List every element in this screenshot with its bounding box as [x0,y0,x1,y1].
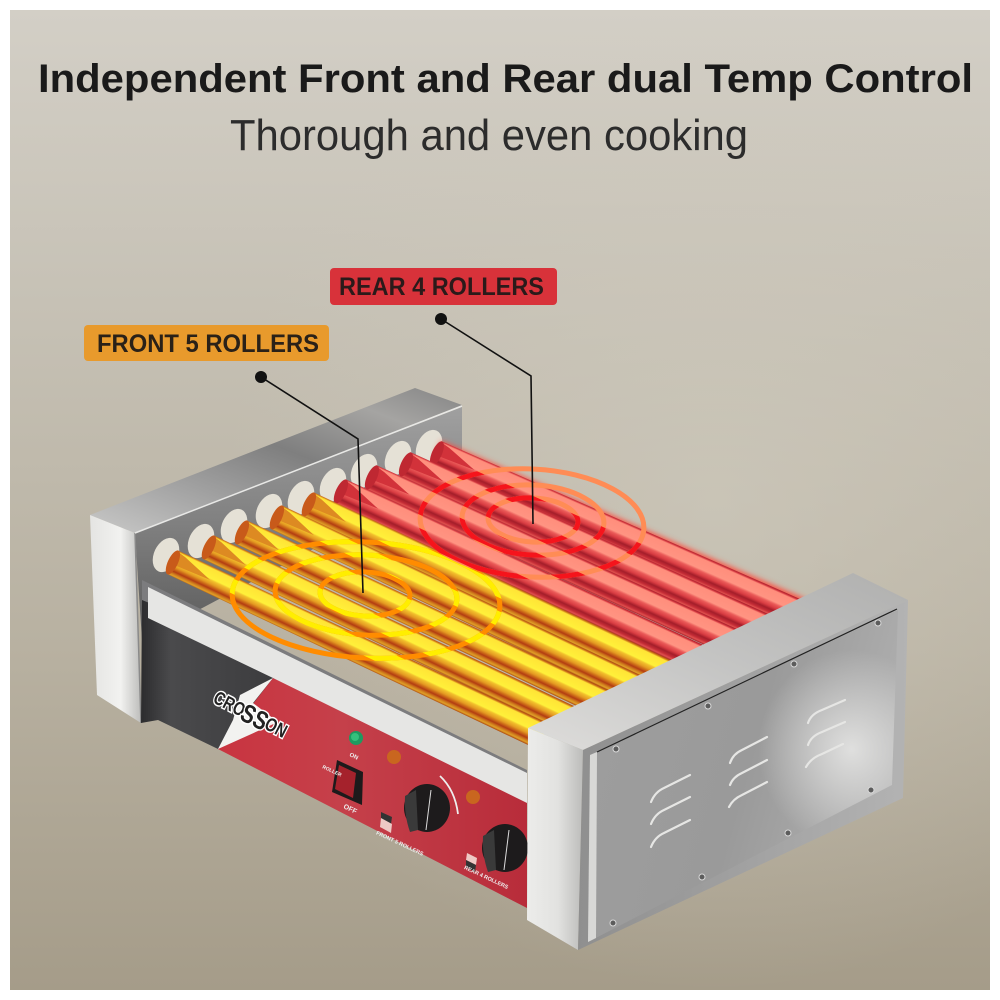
front rollers label: FRONT 5 ROLLERS [375,830,424,858]
rocker switch: OFF [342,803,358,816]
rear rollers label [463,853,509,891]
callout: front 5 rollers: FRONT 5 ROLLERS [97,330,319,358]
front heat rings [229,535,503,665]
rear 4 rollers [330,439,806,673]
under-roller recess [142,580,527,790]
brand logo: ON [261,713,291,742]
leader line: rear [435,313,533,524]
callout: rear 4 rollers: REAR 4 ROLLERS [339,273,544,301]
brand logo: CRO [210,687,249,721]
front rail [148,587,527,803]
roller collars [148,426,447,576]
roller glow [436,438,806,614]
black front panel [141,600,290,749]
heating lights [387,750,480,804]
side plate [588,610,898,942]
red control panel [218,678,527,908]
rear heat rings [417,463,647,583]
rocker switch: ROLLER [321,764,343,779]
screws [610,620,881,926]
front temperature dial [404,776,458,832]
brand logo [208,678,292,749]
right end cap [527,573,908,950]
vent slots [651,700,845,847]
rocker switch [321,760,363,816]
rear rollers label: REAR 4 ROLLERS [463,865,509,891]
hot dog roller grill [90,388,908,950]
front 5 rollers [162,490,677,749]
power indicator [348,731,363,762]
brand logo: SS [236,698,273,736]
leader line: front [255,371,363,593]
front rollers label [375,812,424,858]
power indicator: ON [348,752,359,762]
rear temperature dial [482,824,528,872]
left end cap [90,388,462,723]
subtitle: Thorough and even cooking [230,111,748,160]
title: Independent Front and Rear dual Temp Control [38,57,973,101]
